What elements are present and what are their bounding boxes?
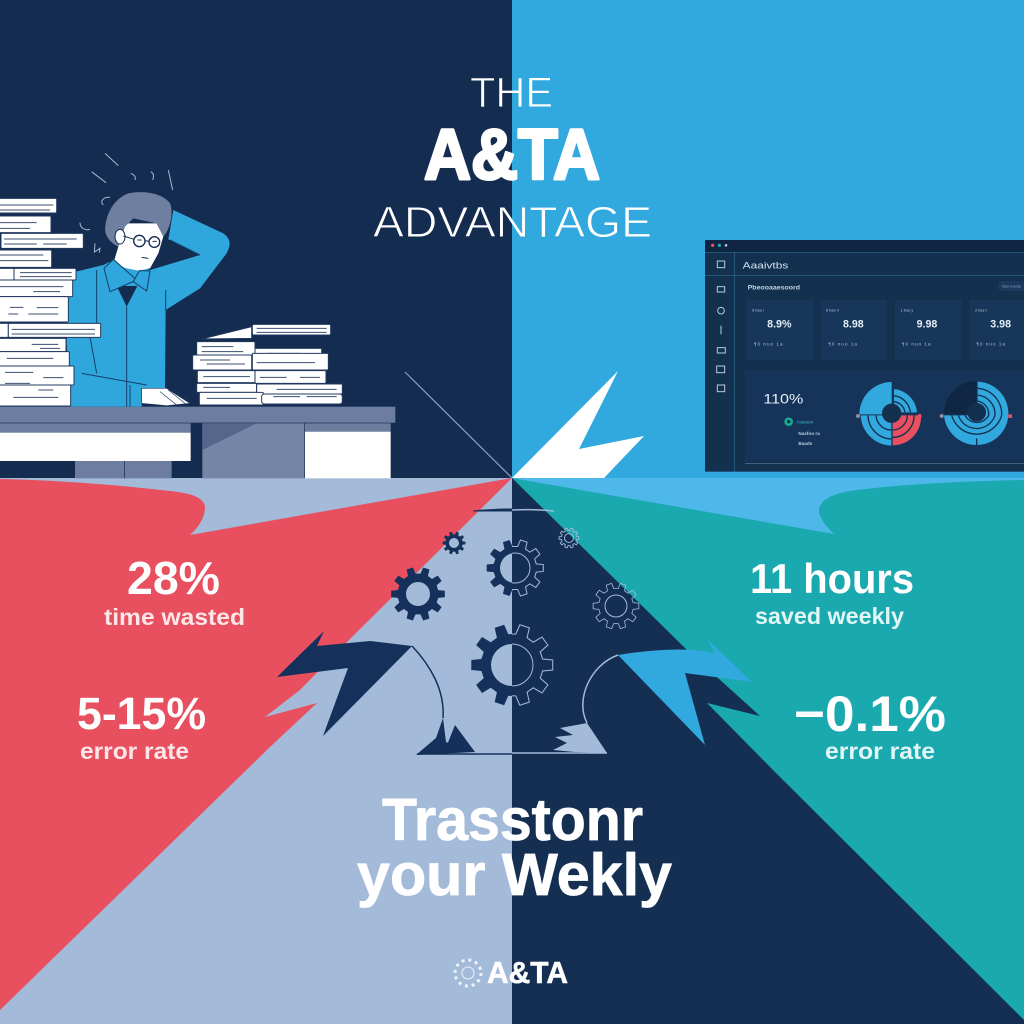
stat: hours saved: saved weekly <box>755 603 904 629</box>
tagline: Trasstonr <box>382 787 643 853</box>
panel: teal after wedge <box>512 478 1024 1020</box>
arrow: dark left arrow <box>277 631 475 755</box>
dashboard button: Bad suuuta <box>1002 284 1022 288</box>
sidebar icons <box>717 261 725 392</box>
metric cards: 0 bsa r <box>752 307 765 312</box>
base line <box>417 753 607 754</box>
shirt collar and tie <box>104 259 150 307</box>
donut chart two <box>940 381 1012 445</box>
icon: split gear large <box>471 625 553 705</box>
icon: logo sun <box>455 960 481 986</box>
stat: error rate before: 5-15% <box>77 688 206 739</box>
worker body <box>67 210 230 407</box>
stat: hours saved <box>750 555 914 629</box>
chart legend: Aaxaon <box>797 420 814 426</box>
metric cards: 2 bss t <box>975 307 988 312</box>
title line: ADVANTAGE: ADVANTAGE <box>373 198 652 247</box>
donut chart one <box>856 382 922 446</box>
stat: hours saved: 11 hours <box>750 555 914 602</box>
stat: time wasted: time wasted <box>104 604 245 630</box>
chart legend <box>784 417 820 446</box>
gear cluster <box>391 528 639 705</box>
worker head <box>105 192 172 271</box>
chart panel <box>745 370 1024 463</box>
tagline: your Wekly <box>357 842 672 908</box>
icon: white bolt <box>512 371 644 478</box>
icon: outline gear right <box>593 583 639 629</box>
icon: medium solid gear <box>391 567 445 621</box>
metric cards: 3.98 <box>990 318 1011 330</box>
metric cards <box>747 300 1024 360</box>
dashboard frame <box>705 240 1024 472</box>
title line: THE: THE <box>470 69 553 117</box>
illustration: overwhelmed worker at desk <box>0 153 395 478</box>
icon: split gear top <box>487 540 543 596</box>
worker hand <box>142 388 190 406</box>
logo: A&TA <box>455 955 568 990</box>
metric cards: ¶0 nuo 1a <box>754 341 784 346</box>
stat: error rate after: error rate <box>825 738 935 764</box>
dashboard subheading: Pbeooaaesoord <box>748 285 800 291</box>
stat: error rate after: −0.1% <box>794 686 946 742</box>
desk <box>0 407 395 478</box>
metric cards: 8.98 <box>843 318 864 330</box>
top connector line <box>473 509 554 511</box>
dashboard mockup <box>705 240 1024 472</box>
left paper stack <box>0 198 101 406</box>
metric cards: 1 bss y <box>901 307 913 312</box>
divider line <box>405 372 512 478</box>
stress marks <box>80 153 173 253</box>
logo wordmark: A&TA <box>487 955 568 990</box>
metric cards: 8.9% <box>767 318 792 330</box>
metric cards: ¶0 nuo 1a <box>902 341 932 346</box>
big value: 110% <box>763 390 803 406</box>
icon: small solid gear <box>443 532 465 554</box>
tagline <box>357 787 672 908</box>
metric cards: 9.98 <box>917 318 937 330</box>
dashboard button <box>998 281 1024 291</box>
stat: error rate before: error rate <box>80 738 189 764</box>
stat: error rate before <box>77 688 206 764</box>
metric cards: 8 bss rr <box>826 307 840 312</box>
chart legend: Baads <box>798 441 813 446</box>
panel: red before wedge <box>0 478 512 1010</box>
chart legend: Nasfoo ra <box>798 431 820 436</box>
title line: A&TA: A&TA <box>424 116 600 195</box>
arrow: blue right arrow <box>553 639 752 753</box>
stat: time wasted: 28% <box>127 552 220 604</box>
title <box>373 69 652 247</box>
right paper stack <box>193 324 342 405</box>
icon: small outline gear <box>559 528 579 548</box>
metric cards: ¶0 nuo 1a <box>828 341 858 346</box>
dashboard heading: Aaaivtbs <box>743 261 789 271</box>
metric cards: ¶0 nuo 1a <box>976 341 1006 346</box>
stat: error rate after <box>794 686 946 764</box>
stat: time wasted <box>104 552 245 630</box>
